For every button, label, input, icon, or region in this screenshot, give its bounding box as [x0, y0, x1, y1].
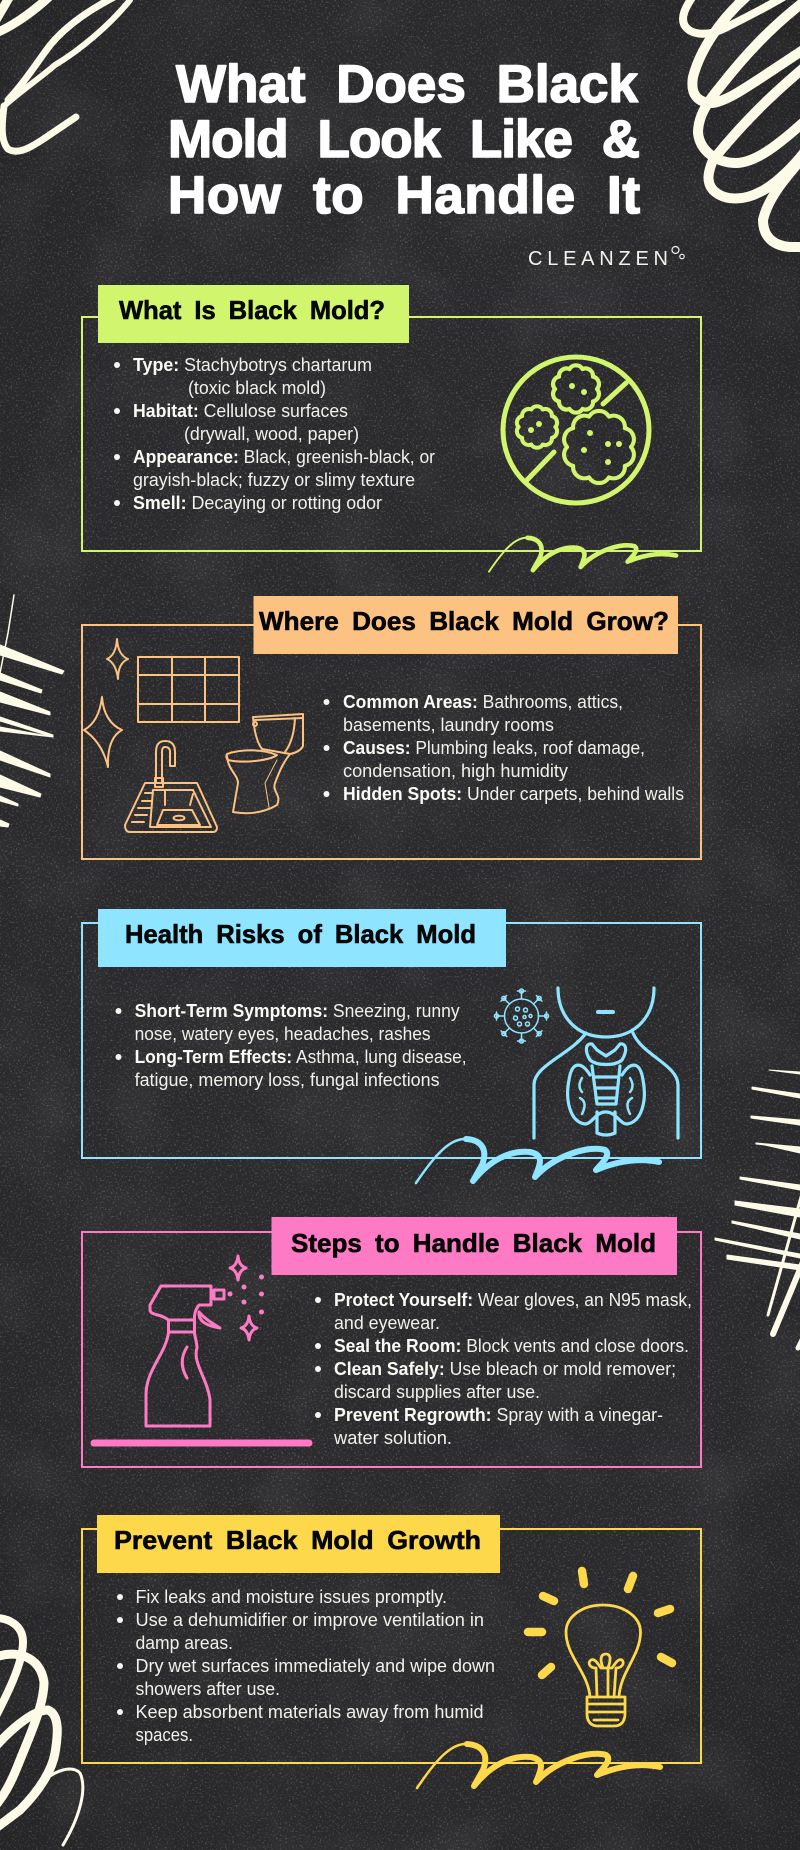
- heading: Steps to Handle: [272, 1217, 677, 1275]
- text block: where it grows: Hidden Spots: Under carpets, behind walls: [343, 784, 684, 804]
- heading: Prevent Growth: Prevent Black Mold Growth: [114, 1525, 481, 1555]
- heading: What Is Black Mold: [98, 285, 409, 343]
- text block: where it grows: [324, 692, 684, 804]
- heading: Where Does Black Mold Grow: Where Does Black Mold Grow?: [259, 606, 669, 636]
- icon: virus: [494, 989, 548, 1043]
- text block: where it grows: Common Areas: Bathrooms, attics,: [343, 692, 623, 712]
- heading: Steps to Handle: Steps to Handle Black Mold: [291, 1228, 656, 1258]
- text block: steps: and eyewear.: [334, 1313, 440, 1333]
- squiggle accent: yellow: [417, 1744, 660, 1788]
- text block: health risks: Long-Term Effects: Asthma, lung disease,: [135, 1047, 467, 1067]
- text block: steps: Protect Yourself: Wear gloves, an N95 mask,: [334, 1290, 692, 1310]
- text block: steps: water solution.: [333, 1428, 452, 1448]
- squiggle accent: blue: [416, 1139, 659, 1183]
- icon: throat and thyroid: [534, 988, 678, 1138]
- title: How to Handle It: [168, 166, 640, 225]
- text block: prevention tips: spaces.: [136, 1725, 193, 1745]
- text block: mold facts: [114, 355, 435, 513]
- text block: health risks: [116, 1001, 467, 1090]
- heading: Health Risks: [98, 909, 506, 967]
- heading: What Is Black Mold: What Is Black Mold?: [119, 295, 385, 325]
- text block: mold facts: Type: Stachybotrys chartarum: [133, 355, 372, 375]
- icon: light bulb: [528, 1571, 672, 1726]
- text block: health risks: Short-Term Symptoms: Sneezing, runny: [135, 1001, 460, 1021]
- text block: prevention tips: damp areas.: [136, 1633, 233, 1653]
- scribble: left middle strokes: [0, 595, 64, 827]
- heading: Where Does Black Mold Grow: [254, 596, 678, 654]
- panel: Prevent Black Mold Growth: [82, 1515, 701, 1788]
- icon: bathroom illustration: [84, 639, 303, 832]
- heading: Prevent Growth: [97, 1515, 500, 1573]
- text block: steps: discard supplies after use.: [334, 1382, 540, 1402]
- text block: where it grows: condensation, high humidity: [343, 761, 568, 781]
- text block: prevention tips: Dry wet surfaces immediately and wipe down: [136, 1656, 495, 1676]
- scribble: top left: [0, 0, 130, 151]
- icon: mold prohibited: [503, 357, 649, 503]
- text block: prevention tips: showers after use.: [136, 1679, 280, 1699]
- panel: Health Risks of Black Mold: [82, 909, 701, 1183]
- title: Mold Look Like &: [168, 110, 640, 169]
- panel: Steps to Handle Black Mold: [82, 1217, 701, 1467]
- text block: mold facts: Habitat: Cellulose surfaces: [133, 401, 348, 421]
- text block: health risks: fatigue, memory loss, fungal infections: [135, 1070, 440, 1090]
- title: What Does Black: [176, 55, 639, 114]
- scribble: top right: [683, 0, 800, 247]
- title: [168, 55, 640, 225]
- text block: mold facts: Appearance: Black, greenish-black, or: [133, 447, 435, 467]
- text block: prevention tips: [117, 1587, 495, 1745]
- text block: mold facts: (toxic black mold): [188, 378, 326, 398]
- text block: where it grows: Causes: Plumbing leaks, roof damage,: [343, 738, 645, 758]
- icon: spray bottle: [94, 1256, 309, 1443]
- text block: prevention tips: Fix leaks and moisture issues promptly.: [136, 1587, 447, 1607]
- text block: health risks: nose, watery eyes, headaches, rashes: [135, 1024, 431, 1044]
- scribble: bottom left: [0, 1618, 83, 1845]
- heading: Health Risks: Health Risks of Black Mold: [125, 919, 476, 949]
- text block: mold facts: grayish-black; fuzzy or slimy texture: [133, 470, 415, 490]
- panel: Where Does Black Mold Grow: [82, 596, 701, 859]
- text block: where it grows: basements, laundry rooms: [343, 715, 554, 735]
- text block: prevention tips: Keep absorbent materials away from humid: [136, 1702, 484, 1722]
- text block: mold facts: Smell: Decaying or rotting odor: [133, 493, 382, 513]
- squiggle accent: green: [489, 538, 676, 572]
- text block: steps: [315, 1290, 692, 1448]
- logo: Cleanzen: CLEANZEN: [528, 248, 668, 270]
- text block: prevention tips: Use a dehumidifier or improve ventilation in: [136, 1610, 484, 1630]
- scribble: right middle strokes: [715, 1070, 800, 1348]
- text block: steps: Clean Safely: Use bleach or mold remover;: [334, 1359, 676, 1379]
- text block: mold facts: (drywall, wood, paper): [184, 424, 359, 444]
- text block: steps: Prevent Regrowth: Spray with a vinegar-: [334, 1405, 663, 1425]
- text block: steps: Seal the Room: Block vents and close doors.: [334, 1336, 689, 1356]
- panel: What Is Black Mold: [82, 285, 701, 572]
